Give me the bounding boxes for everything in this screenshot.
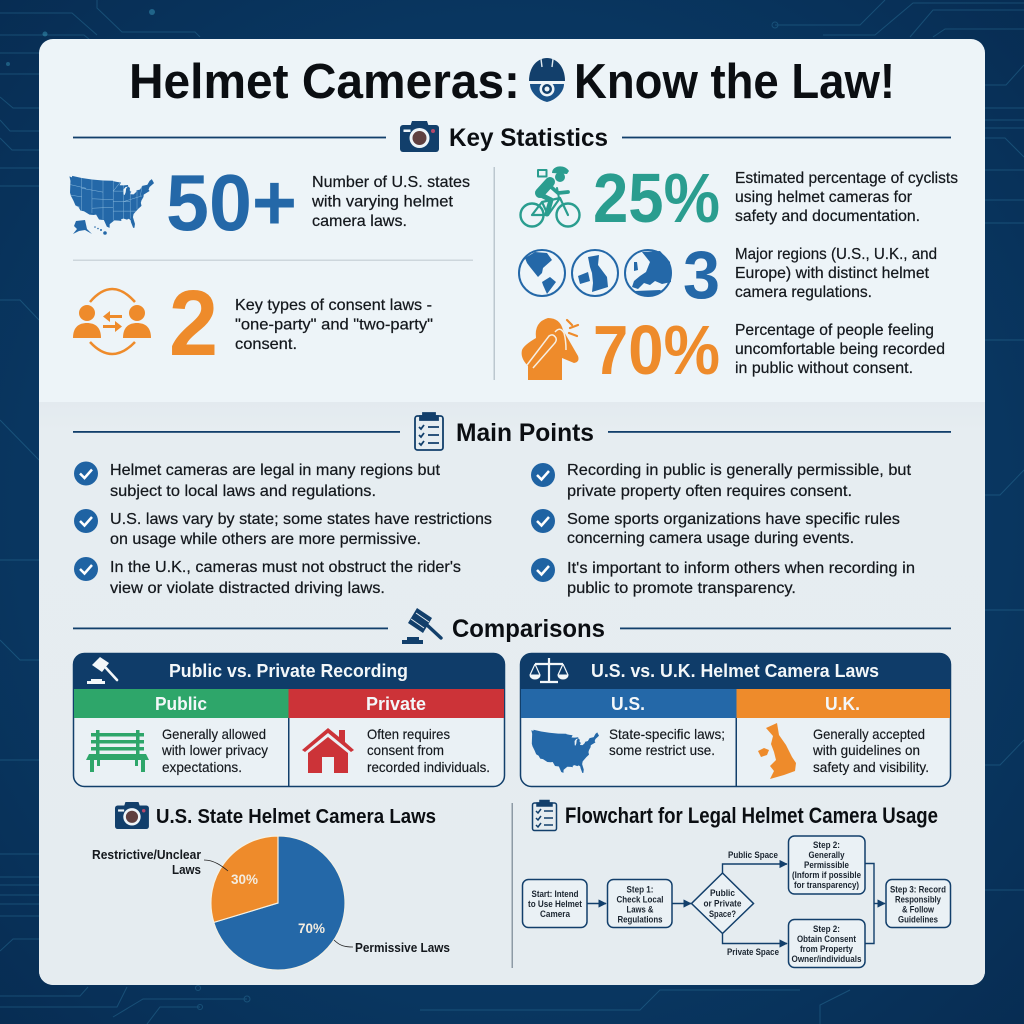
step 2 box: private: from Property: [800, 944, 854, 955]
column header: U.S.: U.S.: [611, 694, 645, 714]
branch label: public: Public Space: [728, 850, 778, 861]
icon: clipboard: [532, 800, 556, 830]
main points: left column: [74, 462, 492, 597]
start box: Start: Intend: [532, 889, 579, 900]
description: consent.: [235, 336, 297, 353]
public text: Generally allowed: [162, 726, 266, 742]
description: [311, 174, 470, 230]
icon: helmet camera: [529, 58, 565, 102]
step 2 box: private: Obtain Consent: [797, 934, 857, 945]
point 1: [74, 462, 441, 500]
section heading: comparisons: Comparisons: [452, 615, 605, 643]
description: Number of U.S. states: [312, 174, 470, 191]
icon: gavel: [402, 608, 441, 644]
panel header: Public vs. Private Recording: [169, 661, 408, 681]
slice values: 70%: [298, 920, 326, 936]
icon: white gavel: [87, 657, 117, 684]
point 1: Helmet cameras are legal in many regions but: [110, 462, 441, 479]
section heading: key statistics: Key Statistics: [449, 124, 608, 152]
section heading: main points: [73, 413, 951, 450]
private text: Often requires: [367, 726, 450, 742]
public text: with lower privacy: [161, 742, 268, 758]
U.S. text: [609, 726, 725, 758]
description: Major regions (U.S., U.K., and: [735, 246, 937, 263]
point 2: [74, 509, 492, 548]
step 2 box: private: Step 2:: [813, 924, 840, 935]
point 5: [531, 509, 900, 547]
icon: globe Americas: [519, 250, 565, 296]
start box: [522, 880, 587, 928]
flowchart: [522, 836, 950, 968]
point 3: In the U.K., cameras must not obstruct the rider's: [110, 559, 461, 576]
point 6: public to promote transparency.: [567, 580, 796, 597]
point 4: private property often requires consent.: [567, 483, 852, 500]
stat: 25% cyclists: [520, 159, 958, 237]
icon: person shielding face: [522, 318, 578, 380]
leader lines: [204, 860, 353, 947]
decision diamond: [692, 873, 754, 934]
slice: permissive 70%: [214, 836, 345, 970]
description: [735, 246, 937, 301]
step 2 box: private: [788, 920, 865, 968]
column header: U.K.: U.K.: [825, 694, 860, 714]
pie chart: [92, 836, 450, 970]
description: Estimated percentage of cyclists: [735, 170, 958, 187]
stat: 50+ states: 50+: [166, 158, 297, 247]
U.S. text: some restrict use.: [609, 742, 715, 758]
step 3 box: Step 3: Record: [890, 884, 946, 896]
label: permissive: Permissive Laws: [355, 940, 450, 955]
icon: camera: [400, 121, 439, 152]
icon: clipboard checklist: [415, 413, 443, 450]
arrows: [587, 864, 885, 944]
section heading: comparisons: [73, 608, 951, 644]
panel: U.S. vs U.K. laws: [520, 653, 951, 786]
label: restrictive: [92, 847, 201, 877]
stat: 3 regions: [519, 237, 937, 313]
icon: U.S. map: [69, 176, 154, 235]
title: Know the Law!: [574, 55, 895, 109]
description: using helmet cameras for: [735, 189, 913, 206]
point 1: subject to local laws and regulations.: [110, 483, 376, 500]
step 2 box: public: (Inform if possible: [792, 870, 861, 881]
icon: globe Europe: [625, 250, 671, 296]
panel: public vs private recording: [73, 653, 505, 786]
decision diamond: Space?: [709, 909, 736, 920]
step 3 box: Guidelines: [898, 914, 938, 926]
icon: U.S. map: [531, 730, 599, 773]
icon: house: [302, 728, 354, 773]
description: [735, 322, 945, 377]
section heading: main points: Main Points: [456, 419, 594, 447]
U.K. text: with guidelines on: [812, 742, 920, 758]
step 2 box: public: for transparency): [794, 880, 859, 891]
slice values: 30%: [231, 871, 259, 887]
step 3 box: [886, 880, 950, 928]
icon: globe U.K.: [572, 250, 618, 296]
description: uncomfortable being recorded: [735, 341, 945, 358]
icon: two people exchanging: [73, 289, 151, 354]
icon: camera: [115, 802, 149, 829]
point 6: It's important to inform others when recording in: [567, 560, 915, 577]
step 2 box: private: Owner/individuals: [792, 954, 862, 965]
column header: U.S.: [521, 689, 736, 718]
panel header: U.S. vs. U.K. Helmet Camera Laws: [591, 661, 879, 681]
U.K. text: safety and visibility.: [813, 759, 929, 775]
start box: to Use Helmet: [528, 899, 583, 910]
column header: private: Private: [366, 694, 426, 714]
description: [235, 297, 433, 353]
description: with varying helmet: [311, 194, 454, 210]
chart heading: U.S. state laws: [115, 802, 436, 829]
point 2: on usage while others are more permissive.: [110, 531, 421, 548]
icon: bench: [86, 730, 149, 772]
point 5: Some sports organizations have specific rules: [567, 511, 900, 528]
step 3 box: Responsibly: [895, 894, 942, 906]
stat: 70% uncomfortable: 70%: [593, 311, 720, 389]
decision diamond: or Private: [704, 898, 742, 910]
section heading: key statistics: [73, 121, 951, 152]
step 1 box: Step 1:: [626, 884, 654, 896]
U.K. text: Generally accepted: [813, 726, 925, 742]
flowchart heading: Flowchart for Legal Helmet Camera Usage: [565, 803, 938, 828]
public text: [161, 726, 268, 775]
private text: consent from: [367, 742, 444, 758]
column header: public: [74, 689, 288, 718]
description: Europe) with distinct helmet: [735, 265, 930, 282]
step 2 box: public: [788, 836, 865, 894]
stat: 2 consent types: 2: [169, 271, 218, 375]
stat: 70% uncomfortable: [522, 311, 945, 389]
panel header: [520, 653, 951, 689]
slice values: [231, 871, 326, 936]
start box: Camera: [540, 909, 571, 920]
column header: public: Public: [155, 694, 207, 714]
stat: 3 regions: 3: [683, 237, 720, 313]
step 2 box: public: Step 2:: [813, 840, 840, 851]
description: safety and documentation.: [735, 208, 920, 225]
slice: restrictive 30%: [211, 836, 278, 922]
chart heading: U.S. state laws: U.S. State Helmet Camera Laws: [156, 805, 436, 828]
icon: cyclist: [520, 166, 580, 226]
branch label: private: Private Space: [727, 947, 779, 958]
public text: expectations.: [162, 759, 242, 775]
icon: scales of justice: [530, 658, 568, 682]
step 2 box: public: Generally: [808, 850, 845, 861]
label: restrictive: Restrictive/Unclear: [92, 847, 201, 862]
private text: recorded individuals.: [367, 759, 490, 775]
U.K. text: [812, 726, 929, 775]
point 3: view or violate distracted driving laws.: [110, 580, 385, 597]
step 3 box: & Follow: [902, 904, 934, 916]
title: Helmet Cameras:: [129, 55, 520, 109]
description: Key types of consent laws -: [235, 297, 432, 314]
column header: private: [288, 689, 504, 718]
description: in public without consent.: [735, 360, 913, 377]
column header: U.K.: [736, 689, 950, 718]
step 1 box: [608, 880, 672, 928]
point 6: [531, 558, 915, 597]
step 2 box: public: Permissible: [804, 860, 849, 871]
description: camera regulations.: [735, 284, 872, 301]
point 4: [531, 462, 912, 500]
flowchart heading: [532, 800, 938, 830]
point 4: Recording in public is generally permissible, but: [567, 462, 912, 479]
point 5: concerning camera usage during events.: [567, 530, 854, 547]
U.S. text: State-specific laws;: [609, 726, 725, 742]
description: "one-party" and "two-party": [235, 316, 433, 334]
stat: 25% cyclists: 25%: [593, 159, 720, 237]
title: [129, 55, 895, 109]
point 3: [74, 557, 461, 597]
description: [735, 170, 958, 225]
step 1 box: Regulations: [618, 914, 662, 926]
stat: 2 consent types: [73, 271, 433, 375]
description: Percentage of people feeling: [735, 322, 934, 339]
label: restrictive: Laws: [172, 862, 201, 877]
icon: U.K. map: [758, 723, 796, 779]
description: camera laws.: [312, 213, 407, 230]
panel header: [73, 653, 505, 689]
stat: 50+ states: [70, 174, 470, 235]
point 2: U.S. laws vary by state; some states have restrictions: [110, 511, 492, 528]
private text: [367, 726, 490, 775]
decision diamond: Public: [710, 888, 735, 899]
step 1 box: Laws &: [626, 904, 654, 916]
main points: right column: [531, 462, 915, 597]
step 1 box: Check Local: [616, 894, 664, 906]
